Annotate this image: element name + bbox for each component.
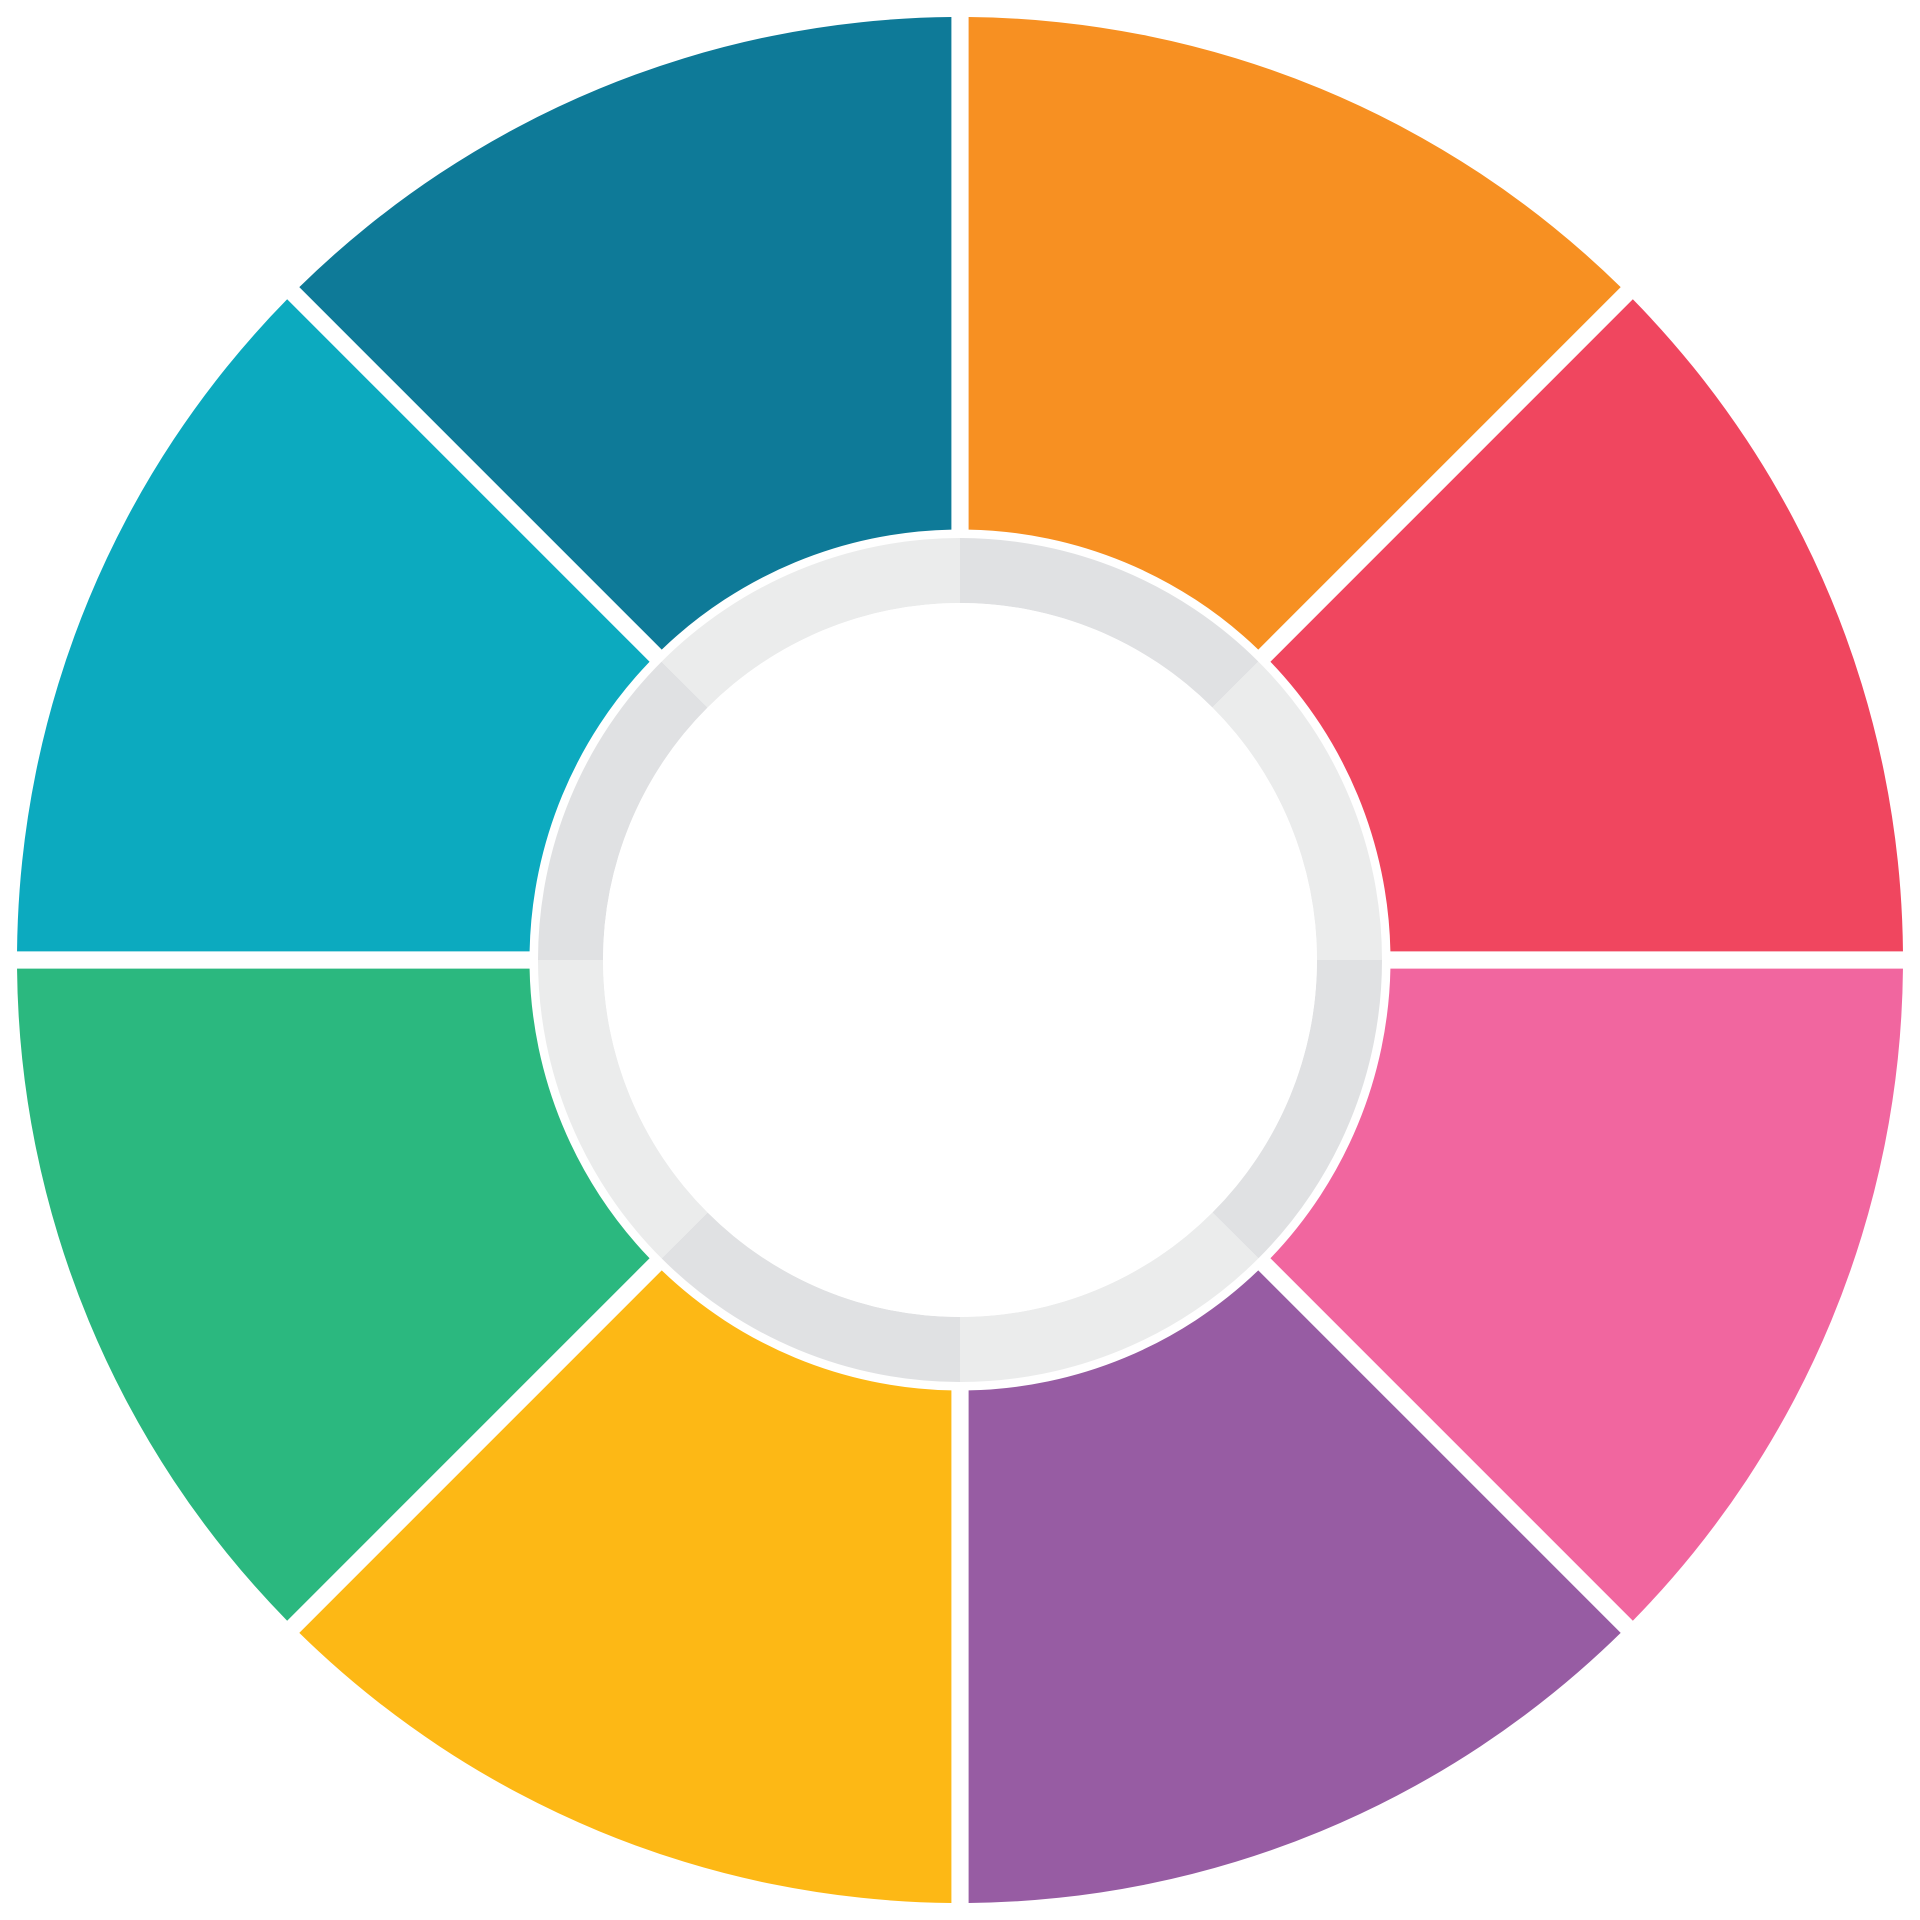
ring segment: lower left, light	[538, 960, 708, 1258]
ring segment: bottom left, dark	[662, 1212, 960, 1382]
segment: purple, bottom right	[969, 1270, 1621, 1903]
segment: green, lower left	[17, 969, 650, 1621]
ring segment: upper right, light	[1212, 662, 1382, 960]
segment: red, upper right	[1270, 299, 1903, 951]
segment: yellow, bottom left	[299, 1270, 951, 1903]
segment: orange, top right	[969, 17, 1621, 650]
ring segment: top right, dark	[960, 538, 1258, 708]
ring segment: bottom right, light	[960, 1212, 1258, 1382]
ring segment: upper left, dark	[538, 662, 708, 960]
segment: cyan, upper left	[17, 299, 650, 951]
ring segment: lower right, dark	[1212, 960, 1382, 1258]
white centre circle	[603, 603, 1317, 1317]
ring segment: top left, light	[662, 538, 960, 708]
grey inner ring	[538, 538, 1382, 1382]
segment: dark teal, top left	[299, 17, 951, 650]
segment: pink, lower right	[1270, 969, 1903, 1621]
